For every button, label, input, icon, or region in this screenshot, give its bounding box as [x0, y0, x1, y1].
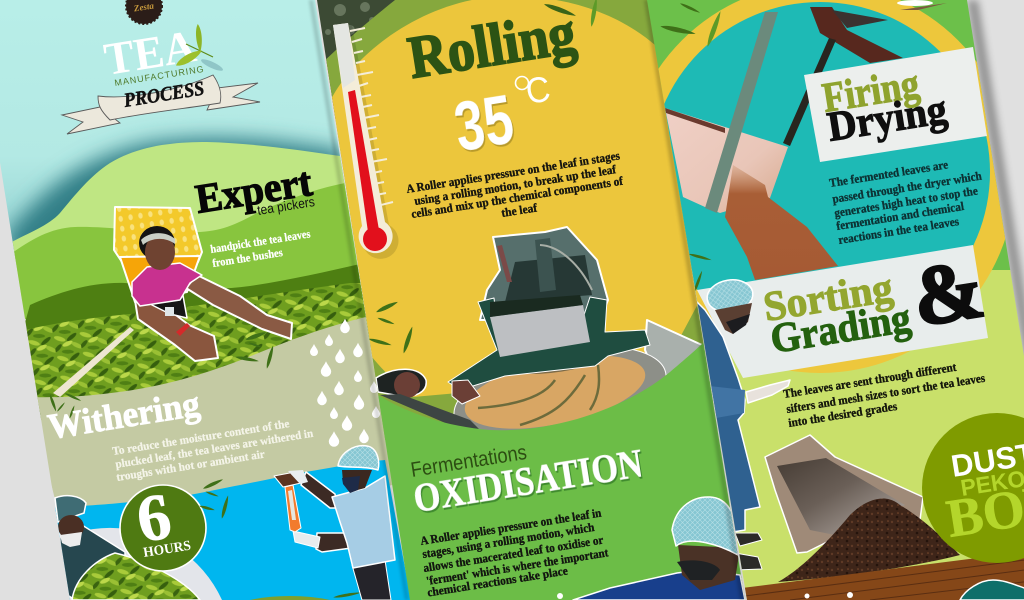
text: firing description: generates high heat to stop the: [833, 183, 979, 220]
teal circle: [650, 2, 990, 342]
text: rolling description: using a rolling motion, to break up the leaf: [413, 162, 618, 208]
text: oxidisation description: chemical reactions take place: [426, 563, 569, 599]
bottom green mound: [250, 596, 330, 600]
right arm: [645, 320, 702, 385]
text: firing description: reactions in the tea leaves: [837, 214, 960, 247]
olive background: [315, 0, 720, 440]
photo: rolling machine: [376, 227, 702, 460]
heading: Expert tea pickers: tea pickers: [256, 194, 316, 218]
pants: [352, 560, 391, 600]
text: withering description: [112, 418, 315, 484]
heading: Expert tea pickers: [194, 172, 315, 215]
panel: rolling and oxidisation: [315, 0, 745, 600]
leaf branch top: [900, 3, 947, 10]
tray: [274, 472, 301, 487]
text: withering description: plucked leaf, the tea leaves are withered in: [115, 428, 315, 471]
hair net: [705, 277, 755, 315]
steel bar: [705, 12, 778, 213]
orange sample rule: [285, 485, 301, 532]
text: handpick description: from the bushes: [212, 247, 284, 270]
green background: [640, 0, 1024, 270]
temperature: 35: [449, 80, 519, 166]
waist: [151, 295, 188, 319]
sky: [0, 0, 356, 259]
panel: firing and sorting: [625, 0, 1024, 600]
text: firing description: passed through the dryer which: [831, 168, 983, 206]
masked face: [715, 303, 752, 334]
logo badge: [126, 0, 162, 24]
text: sorting description: [782, 360, 986, 430]
icons: leaves near badge: [199, 478, 361, 599]
text: firing description: fermentation and chemical: [835, 199, 965, 233]
card: Sorting and Grading: Sorting: [760, 265, 896, 331]
text: withering description: To reduce the moisture content of the: [112, 418, 290, 458]
card: Firing Drying: [804, 47, 987, 162]
text: rolling description: cells and mix up the chemical components of: [410, 174, 625, 221]
foliage highlights: [325, 2, 375, 35]
ribbon banner: [62, 75, 260, 134]
text: sorting description: sifters and mesh sizes to sort the tea leaves: [785, 371, 986, 416]
tea bush field: [25, 283, 400, 420]
panel shadow: [644, 0, 745, 600]
left foot: [376, 369, 426, 396]
light green background: [640, 270, 1024, 600]
card: Sorting and Grading: &: [906, 242, 990, 345]
light green hill: [12, 142, 363, 300]
text: sorting description: The leaves are sent through different: [782, 360, 957, 401]
card: Firing Drying: Drying: [824, 87, 950, 151]
card: Firing Drying: Firing: [819, 61, 922, 122]
wood beam: [810, 7, 903, 63]
card: Sorting and Grading: Grading: [767, 295, 914, 363]
text: rolling description: [405, 148, 625, 221]
machine head: [480, 227, 608, 320]
panel shadow right: [967, 0, 1024, 600]
photo: sifter with tea pile: [765, 435, 960, 582]
text: handpick description: [210, 232, 310, 268]
wooden stick: [53, 327, 134, 397]
photo: worker in blue coat: [690, 277, 790, 570]
green section: [370, 340, 745, 600]
heading: title lockup: [62, 0, 260, 134]
dark green hill: [20, 264, 400, 340]
logo badge: Zesta: [132, 0, 155, 14]
heading: Expert tea pickers: Expert: [192, 158, 315, 222]
foliage photo: [315, 0, 655, 120]
head: [139, 226, 175, 256]
heading: Oxidisation: OXIDISATION: [410, 440, 646, 521]
withering panel: [38, 317, 392, 506]
badge: 6 hours: [120, 480, 206, 571]
text: oxidisation description: A Roller applies pressure on the leaf in: [419, 505, 603, 548]
text: oxidisation description: [419, 505, 609, 599]
MANUFACTURING subtitle: MANUFACTURING: [114, 64, 204, 88]
thermometer ticks: [350, 28, 393, 206]
shirt: [132, 263, 202, 306]
upper arm: [301, 472, 338, 508]
arm left: [134, 302, 219, 362]
green frame: [448, 297, 650, 390]
silver drum: [490, 305, 590, 357]
text: sorting description: into the desired grades: [787, 399, 898, 430]
shirt: [332, 476, 395, 568]
badge: tea grades: [922, 413, 1024, 563]
arm right: [186, 275, 292, 339]
text: withering description: troughs with hot or ambient air: [116, 449, 266, 484]
badge: 6 hours: 6: [132, 480, 176, 557]
text: firing description: [828, 157, 983, 247]
TEA heading: TEA: [101, 20, 199, 85]
handle: [452, 380, 480, 404]
temperature: C: [523, 68, 553, 112]
coat: [690, 300, 760, 532]
shoes: [735, 533, 762, 546]
panel: picking and withering: [0, 0, 420, 600]
basket: [114, 207, 202, 262]
photo: worker with leaves: [55, 496, 200, 600]
icons: leaves top-left: [660, 2, 723, 294]
photo: worker in hair net: [557, 497, 745, 600]
text: rolling description: the leaf: [500, 200, 539, 220]
icons: top leaves: [543, 0, 599, 27]
icons: leaves by machine: [368, 300, 414, 354]
text: firing description: The fermented leaves are: [828, 157, 950, 190]
PROCESS label: PROCESS: [121, 78, 206, 112]
chute plate: [665, 108, 788, 213]
photo: worker inspecting sample: [274, 446, 395, 600]
mid green hill: [14, 183, 364, 320]
hair net: [338, 446, 379, 470]
face: [342, 470, 372, 492]
icon: thermometer: [333, 23, 398, 259]
hill shadow: [8, 137, 345, 260]
icons: leaves over withering edge: [49, 330, 275, 419]
text: rolling description: A Roller applies pressure on the leaf in stages: [405, 148, 621, 196]
glove hand: [746, 380, 790, 403]
heading: Fermentations: Fermentations: [409, 441, 528, 482]
heading: Withering: Withering: [45, 383, 202, 447]
text: handpick description: handpick the tea leaves: [210, 228, 312, 256]
photo: woman picking tea: [114, 207, 292, 361]
table: wood: [742, 550, 1024, 600]
text: oxidisation description: stages, using a rolling motion, which: [421, 520, 596, 561]
panel shadow: [309, 0, 409, 600]
dark bar: [783, 38, 836, 146]
blue section: [50, 460, 411, 600]
grey arc: [60, 528, 222, 600]
text: oxidisation description: allows the macerated leaf to oxidise or: [422, 533, 605, 575]
sleeve: [700, 385, 745, 420]
icons: rain drops: [310, 319, 380, 447]
tea pour: [725, 165, 838, 280]
lower arm: [315, 532, 348, 553]
badge: 6 hours: HOURS: [142, 539, 192, 561]
yellow circle: [329, 0, 700, 397]
text: oxidisation description: 'ferment' which is where the important: [425, 545, 609, 588]
yellow ring: [625, 0, 1015, 373]
base disc: [445, 330, 675, 460]
photo: dryer chute: [665, 7, 903, 280]
card: Sorting and Grading: [697, 242, 990, 378]
icon: tea leaf sprig: [174, 24, 224, 73]
